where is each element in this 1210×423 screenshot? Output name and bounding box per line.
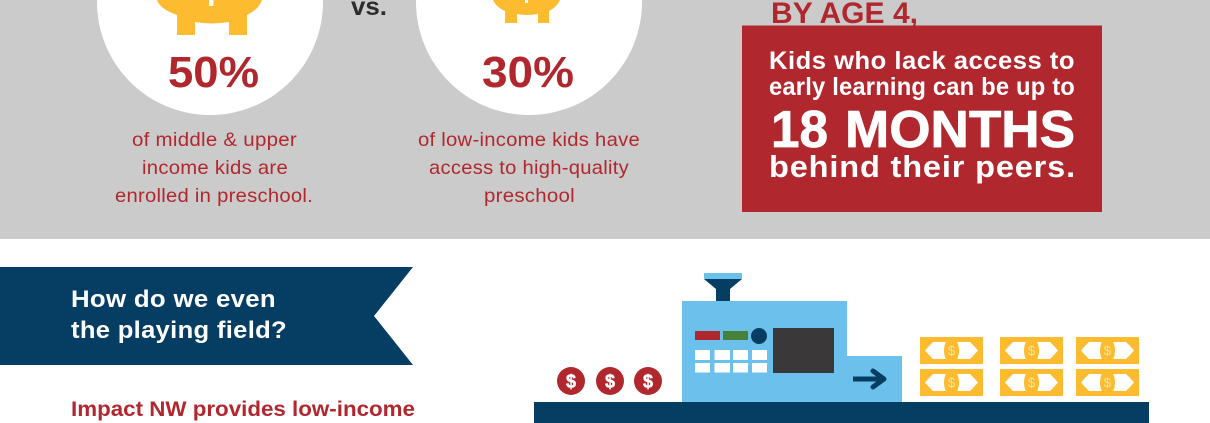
callout text: behind their peers. <box>769 149 1076 184</box>
icon: large piggy bank <box>157 0 262 35</box>
machine funnel <box>704 273 742 301</box>
illustration: money machine <box>534 273 1149 423</box>
icon: dollar bills: $ <box>1028 375 1036 390</box>
panel: preschool access background <box>0 0 1210 239</box>
panel: by age 4 callout <box>742 0 1102 212</box>
text block: impact nw: Impact NW provides low-income <box>71 397 415 421</box>
icon: dollar bills: $ <box>1104 375 1112 390</box>
statistic: 50%: 50% <box>168 48 259 97</box>
icon: dollar bills: $ <box>948 343 956 358</box>
banner: how do we even the playing field: How do we even <box>71 286 276 313</box>
banner: how do we even the playing field <box>0 267 413 365</box>
callout text: MONTHS <box>845 101 1075 159</box>
callout text: 18 <box>771 101 828 159</box>
icon: coins: $ <box>605 372 615 392</box>
control panel <box>695 328 767 372</box>
caption: middle and upper income kids <box>115 129 313 207</box>
conveyor base <box>534 402 1149 423</box>
caption: low income kids <box>418 129 640 207</box>
caption: low income kids: preschool <box>484 185 575 207</box>
statistic: 30%: 30% <box>482 48 574 97</box>
caption: middle and upper income kids: enrolled in preschool. <box>115 185 313 207</box>
banner: how do we even the playing field: the playing field? <box>71 317 287 344</box>
icon: dollar bills <box>920 337 1139 396</box>
caption: low income kids: access to high-quality <box>429 157 629 179</box>
caption: middle and upper income kids: of middle & upper <box>132 129 297 151</box>
caption: middle and upper income kids: income kids are <box>142 157 288 179</box>
callout text: early learning can be up to <box>769 73 1075 101</box>
icon: small piggy bank <box>493 0 560 23</box>
icon: dollar bills: $ <box>948 375 956 390</box>
icon: coins: $ <box>643 372 653 392</box>
circle: low income <box>416 0 642 115</box>
icon: coins: $ <box>566 372 576 392</box>
icon: dollar bills: $ <box>1028 343 1036 358</box>
panel: middle and upper income statistic <box>97 0 323 207</box>
callout text: Kids who lack access to <box>769 47 1075 75</box>
icon: dollar bills: $ <box>1104 343 1112 358</box>
icon: coins <box>557 367 662 395</box>
callout box <box>742 26 1102 212</box>
caption: low income kids: of low-income kids have <box>418 129 640 151</box>
arrow <box>853 371 884 387</box>
machine screen <box>773 328 834 373</box>
circle: middle and upper income <box>97 0 323 115</box>
panel: low income statistic <box>416 0 642 207</box>
machine body <box>682 301 902 402</box>
callout text <box>769 47 1076 184</box>
